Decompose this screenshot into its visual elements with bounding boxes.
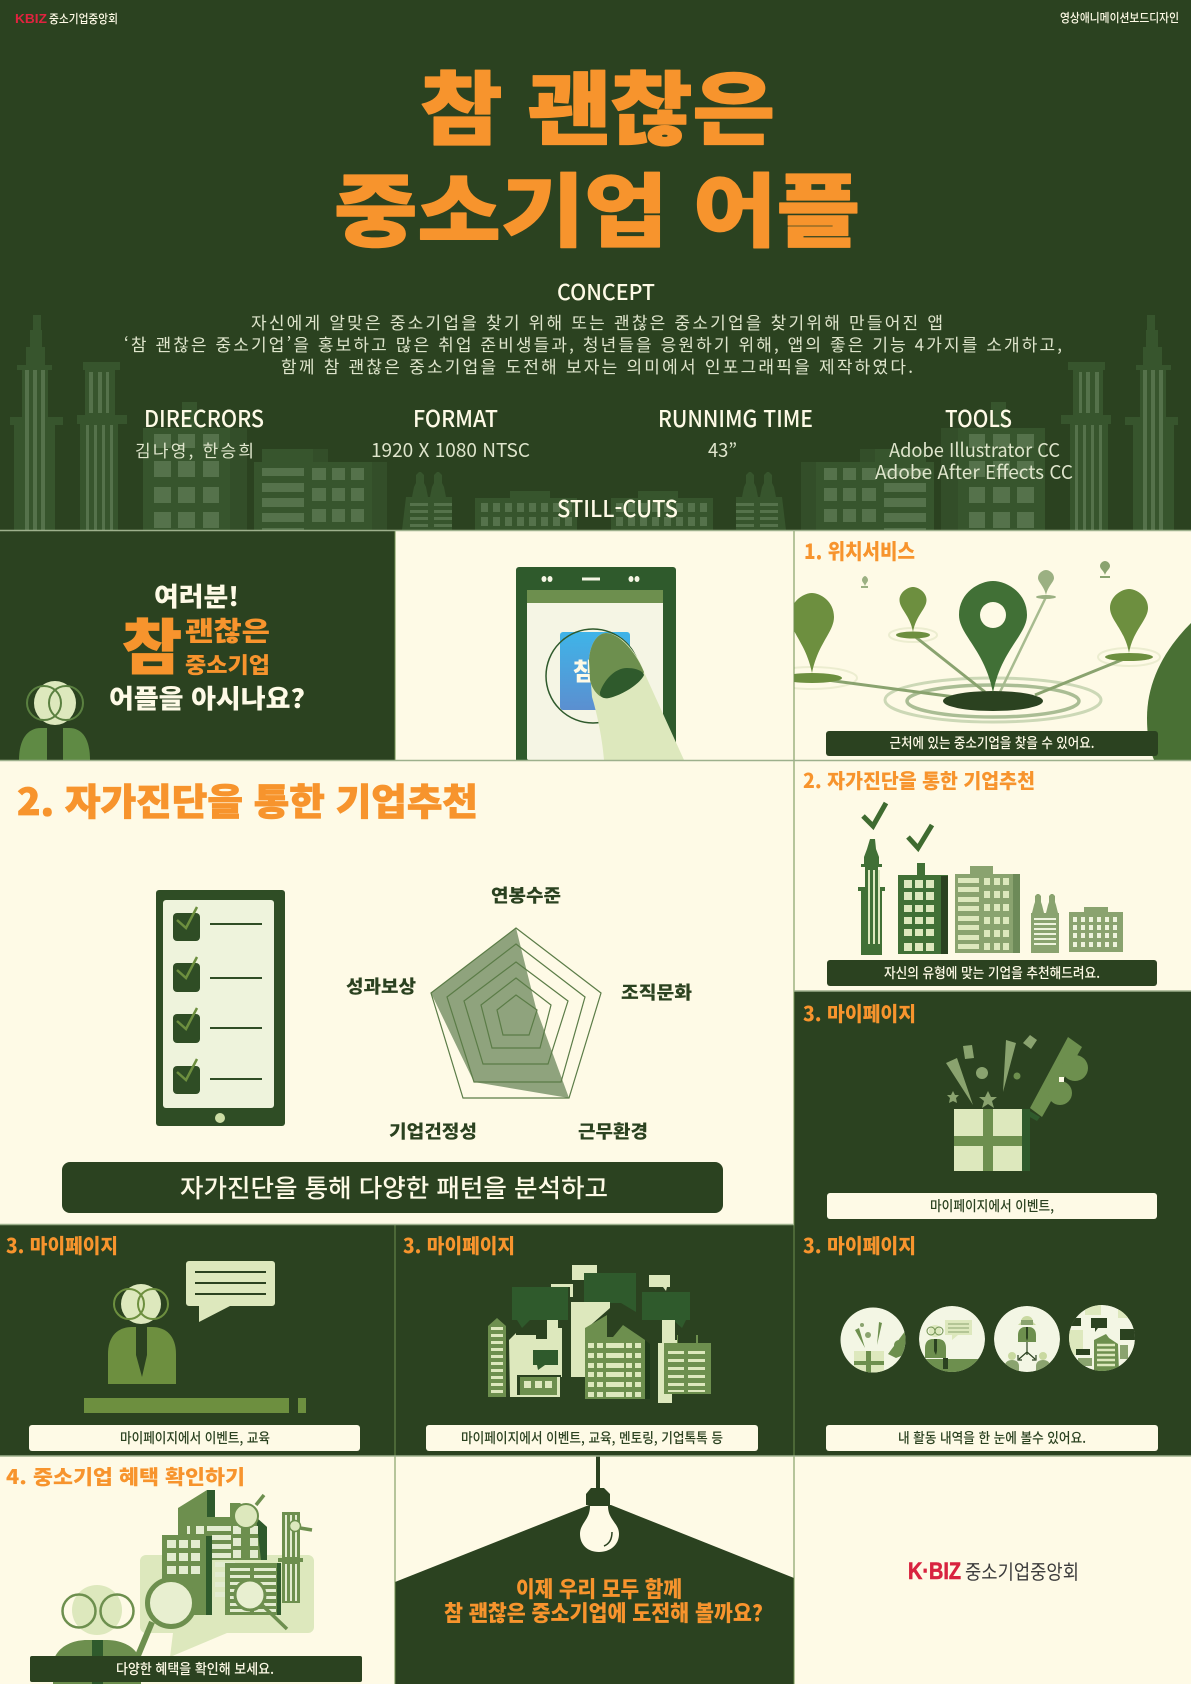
caption: 마이페이지에서 이벤트, 교육 — [120, 1428, 270, 1448]
concept text: ‘참 괜찮은 중소기업’을 홍보하고 많은 취업 준비생들과, 청년들을 응원하기 위해, 앱의 좋은 기능 4가지를 소개하고, — [124, 331, 1062, 356]
caption: 근처에 있는 중소기업을 찾을 수 있어요. — [890, 733, 1094, 753]
icon: circle gift — [840, 1307, 906, 1375]
panel: location service — [767, 530, 1191, 760]
call to action text: 이제 우리 모두 함께 — [516, 1572, 682, 1604]
icon: speech background — [140, 1555, 314, 1657]
skyline background — [10, 315, 1178, 530]
title: 중소기업 어플 — [334, 148, 860, 264]
icon: check marks — [863, 803, 932, 848]
caption: 다양한 혜택을 확인해 보세요. — [116, 1659, 274, 1679]
heading: 2 small: 2. 자가진단을 통한 기업추천 — [803, 765, 1035, 794]
logo: KBIZ header — [15, 10, 118, 27]
radar labels: 근무환경 — [578, 1118, 648, 1144]
department label: 영상애니메이션보드디자인 — [1060, 9, 1179, 26]
credits: tools — [875, 400, 1073, 485]
caption: 내 활동 내역을 한 눈에 볼수 있어요. — [898, 1428, 1086, 1448]
icon: phone — [516, 567, 684, 760]
logo: KBIZ: 중소기업중앙회 — [965, 1556, 1079, 1585]
icon: gift box — [946, 1035, 1088, 1171]
credits: running time — [658, 400, 813, 463]
logo: KBIZ — [908, 1556, 1079, 1585]
map rings and links — [767, 597, 1160, 722]
concept text — [124, 309, 1062, 378]
heading: 4: 4. 중소기업 혜택 확인하기 — [6, 1461, 245, 1490]
caption: 마이페이지에서 이벤트, 교육, 멘토링, 기업톡톡 등 — [461, 1428, 723, 1448]
radar labels: 조직문화 — [621, 979, 692, 1005]
credits: format — [371, 400, 530, 463]
concept text: 자신에게 알맞은 중소기업을 찾기 위해 또는 괜찮은 중소기업을 찾기위해 만들어진 앱 — [251, 309, 943, 334]
caption — [426, 1425, 758, 1451]
icon: inspected buildings — [162, 1490, 303, 1615]
caption — [826, 1425, 1158, 1451]
logo: KBIZ header: KBIZ — [15, 11, 47, 26]
icon: light beam — [395, 1505, 794, 1684]
radar labels: 연봉수준 — [491, 882, 561, 908]
panel: closing logo — [794, 1456, 1191, 1684]
still-cuts heading: STILL-CUTS — [557, 490, 678, 524]
credits: directors: 김나영, 한승희 — [135, 437, 254, 462]
credits: directors — [135, 400, 264, 462]
caption — [62, 1162, 723, 1213]
panel: my page community — [395, 1224, 794, 1456]
caption — [29, 1425, 360, 1451]
icon: app — [560, 632, 630, 710]
icon: company buildings — [858, 839, 1123, 955]
heading: 3: 3. 마이페이지 — [803, 1230, 916, 1259]
panel: my page gift — [794, 991, 1191, 1224]
icon: circle mentor — [994, 1306, 1060, 1372]
intro text: 여러분! — [154, 577, 239, 614]
call to action text: 참 괜찮은 중소기업에 도전해 볼까요? — [444, 1596, 763, 1628]
icon: foreground leaf — [1147, 623, 1191, 760]
caption: 자신의 유형에 맞는 기업을 추천해드려요. — [884, 963, 1100, 983]
credits: format: FORMAT — [413, 400, 498, 434]
icon: app: 참 — [573, 652, 595, 687]
title: 참 괜찮은 — [420, 46, 775, 162]
panel: phone tap — [395, 530, 794, 760]
icon: hanging bulb — [580, 1456, 619, 1552]
icon: desk — [84, 1398, 306, 1413]
credits: directors: DIRECRORS — [144, 400, 264, 434]
credits: tools: TOOLS — [945, 400, 1012, 434]
panel: lamp call to action — [395, 1456, 794, 1684]
credits: tools: Adobe Illustrator CC — [889, 436, 1060, 463]
panel: my page education — [0, 1224, 395, 1456]
icon: finger — [589, 633, 684, 760]
panel: self-diagnosis large — [0, 761, 794, 1224]
radar labels: 기업건정성 — [389, 1118, 477, 1144]
heading: 2 large: 2. 자가진단을 통한 기업추천 — [17, 772, 478, 826]
heading: 3: 3. 마이페이지 — [803, 998, 916, 1027]
panel: my page overview — [804, 1236, 1158, 1451]
heading: 1: 1. 위치서비스 — [804, 536, 915, 566]
intro text: 중소기업 — [185, 648, 270, 680]
icon: circle city — [1069, 1305, 1136, 1372]
caption: 자가진단을 통해 다양한 패턴을 분석하고 — [180, 1169, 608, 1205]
caption — [30, 1656, 362, 1682]
heading: 3: 3. 마이페이지 — [6, 1230, 118, 1259]
caption — [826, 731, 1158, 756]
logo: KBIZ header: 중소기업중앙회 — [49, 10, 118, 27]
heading: 3: 3. 마이페이지 — [403, 1230, 515, 1259]
radar labels — [346, 882, 692, 1144]
icon: circle talk — [919, 1306, 985, 1372]
icon: person with glasses — [19, 681, 90, 760]
icon: magnifying glasses — [234, 1495, 312, 1629]
panel: company recommendation — [794, 761, 1191, 991]
caption — [827, 1193, 1157, 1219]
intro text — [109, 577, 305, 716]
panel: benefits — [0, 1456, 395, 1684]
credits: running time: 43” — [708, 436, 737, 463]
concept heading: CONCEPT — [557, 275, 655, 307]
credits: running time: RUNNIMG TIME — [658, 400, 813, 434]
icon: map pins — [782, 561, 1153, 693]
radar chart — [346, 882, 692, 1144]
intro text: 참 — [122, 600, 182, 687]
panel: intro question — [19, 584, 304, 760]
logo: KBIZ: K·BIZ — [908, 1558, 961, 1585]
radar labels: 성과보상 — [346, 973, 416, 999]
icon: city with speech bubbles — [488, 1265, 711, 1403]
intro text: 괜찮은 — [185, 610, 270, 649]
concept text: 함께 참 괜찮은 중소기업을 도전해 보자는 의미에서 인포그래픽을 제작하였다. — [281, 353, 913, 378]
title — [334, 46, 860, 264]
credits: format: 1920 X 1080 NTSC — [371, 436, 530, 463]
icon: speech bubble — [186, 1261, 275, 1322]
call to action text — [444, 1572, 763, 1628]
icon: person — [108, 1284, 176, 1384]
credits: tools: Adobe After Effects CC — [875, 458, 1073, 485]
caption: 마이페이지에서 이벤트, — [930, 1196, 1054, 1216]
caption — [827, 960, 1157, 986]
intro text: 어플을 아시나요? — [109, 679, 305, 716]
icon: person with glasses — [53, 1580, 194, 1684]
icon: checklist phone — [156, 890, 285, 1126]
